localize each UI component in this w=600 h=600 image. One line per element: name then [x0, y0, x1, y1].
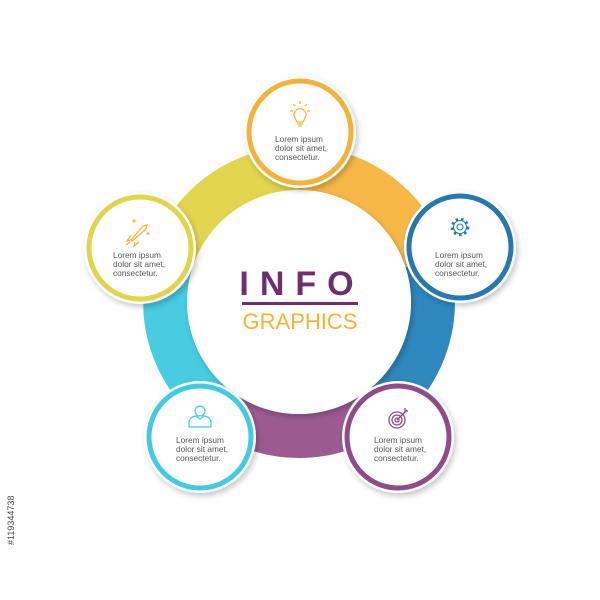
title: GRAPHICS: [243, 309, 357, 334]
node: top (orange): [244, 76, 356, 188]
icon: person: [189, 406, 211, 427]
ring segment: orange: [299, 168, 426, 261]
node: left (yellow): dolor sit amet,: [113, 259, 165, 269]
node: left (yellow): consectetur.: [113, 268, 158, 278]
icon: gear: [452, 219, 468, 235]
node: left (yellow): [84, 192, 196, 304]
icon: bulb: [290, 101, 310, 126]
node: top (orange): consectetur.: [275, 152, 320, 162]
node: bottom-right (purple): Lorem ipsum: [374, 435, 422, 445]
node: top (orange): Lorem ipsum: [275, 134, 323, 144]
node: right (blue): dolor sit amet,: [435, 259, 487, 269]
node: bottom-left (cyan): [144, 381, 256, 493]
node: bottom-right (purple): [342, 381, 454, 493]
ring segment: yellow: [172, 168, 299, 261]
node: right (blue): consectetur.: [435, 268, 480, 278]
node: bottom-left (cyan): consectetur.: [176, 453, 221, 463]
title: [239, 265, 365, 334]
title: INFO: [239, 265, 365, 303]
ring segment: cyan: [165, 261, 220, 410]
ring: [165, 168, 433, 436]
side caption: #119344738: [6, 496, 16, 545]
node: bottom-left (cyan): dolor sit amet,: [176, 444, 228, 454]
icon: target: [389, 408, 408, 428]
node: bottom-right (purple): dolor sit amet,: [374, 444, 426, 454]
ring segment: purple: [220, 410, 378, 436]
icon: rocket: [126, 219, 150, 246]
node: left (yellow): Lorem ipsum: [113, 250, 161, 260]
ring segment: blue: [378, 261, 433, 410]
node: bottom-right (purple): consectetur.: [374, 453, 419, 463]
node: top (orange): dolor sit amet,: [275, 143, 327, 153]
node: right (blue): Lorem ipsum: [435, 250, 483, 260]
center circle: [187, 190, 411, 414]
node: right (blue): [404, 191, 516, 303]
node: bottom-left (cyan): Lorem ipsum: [176, 435, 224, 445]
